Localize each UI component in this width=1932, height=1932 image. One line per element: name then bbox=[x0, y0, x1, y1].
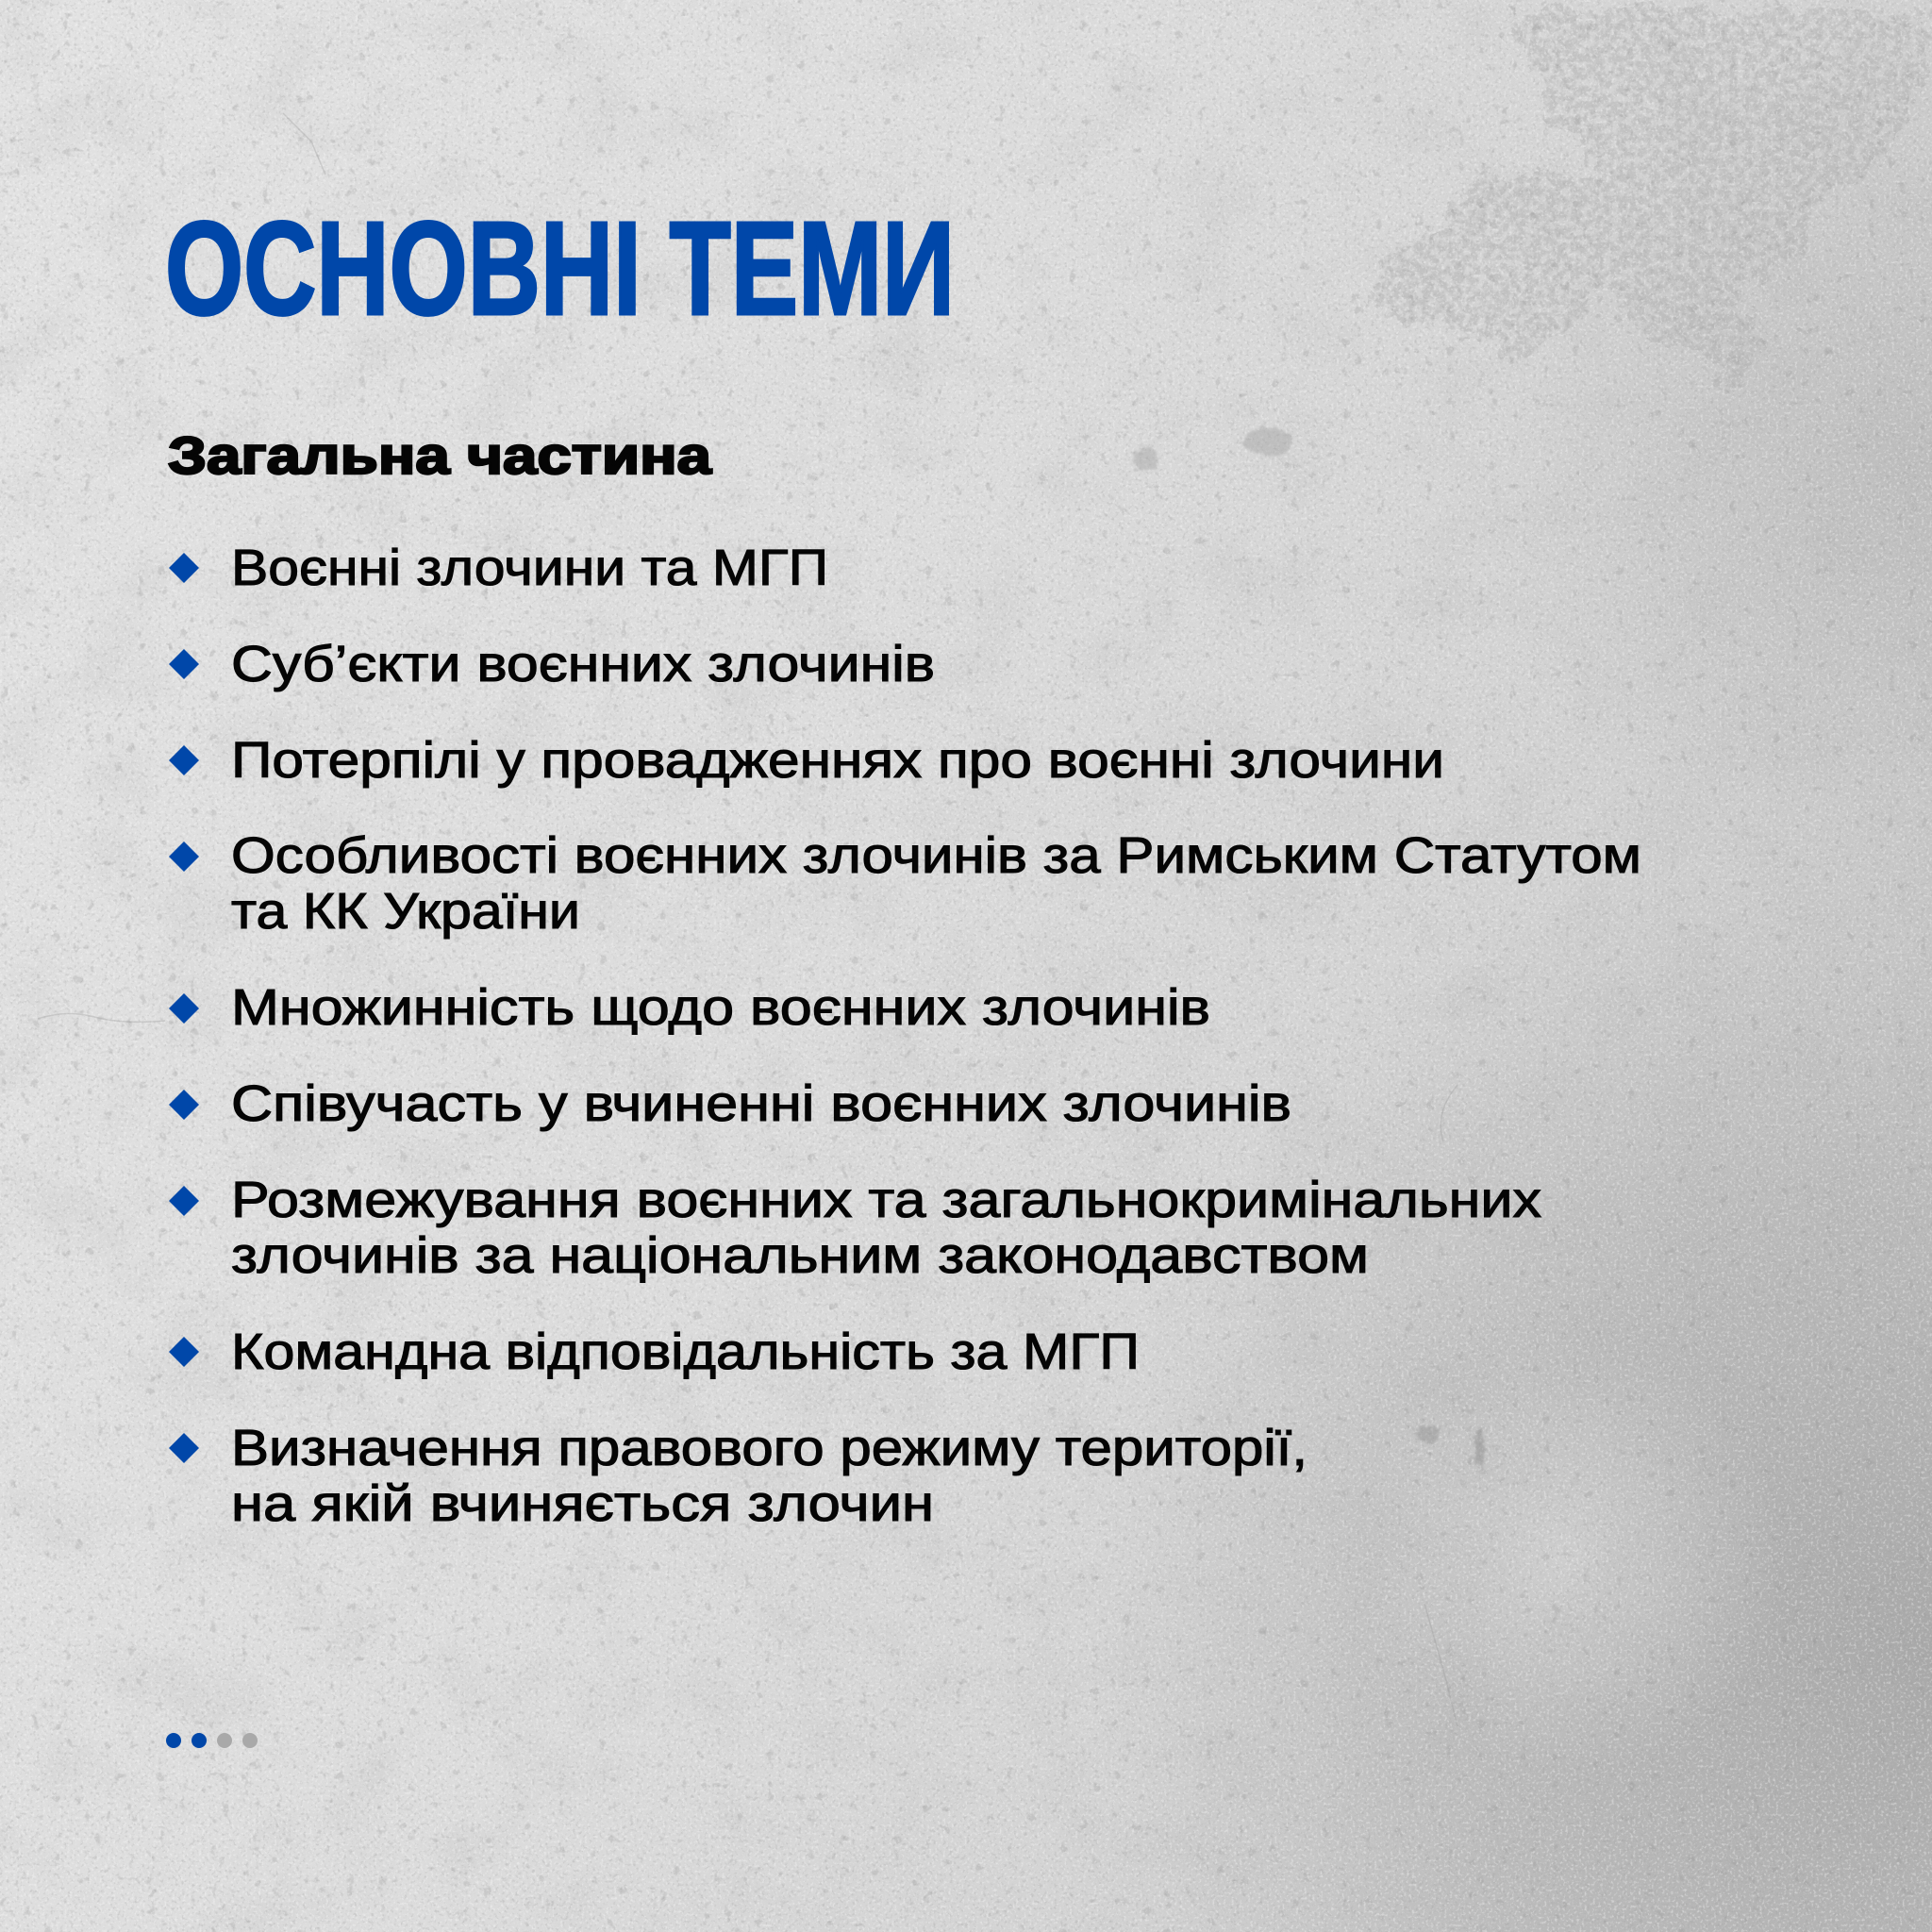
title: ОСНОВНІ ТЕМИ bbox=[165, 193, 955, 342]
list item 6: Співучасть у вчиненні воєнних злочинів bbox=[231, 1075, 1291, 1132]
section heading: Загальна частина bbox=[168, 425, 712, 485]
list item 4: Особливості воєнних злочинів за Римським Статутом bbox=[231, 827, 1641, 884]
pagination dots bbox=[166, 1733, 258, 1748]
list item 4: та КК України bbox=[231, 883, 580, 940]
list item 8: Командна відповідальність за МГП bbox=[231, 1324, 1140, 1380]
list item 7 bbox=[169, 1172, 1541, 1284]
list item 9: Визначення правового режиму території, bbox=[231, 1420, 1307, 1476]
list item 5: Множинність щодо воєнних злочинів bbox=[231, 979, 1210, 1036]
list item 7: Розмежування воєнних та загальнокримінальних bbox=[231, 1172, 1541, 1228]
list item 9: на якій вчиняється злочин bbox=[231, 1475, 934, 1532]
list item 7: злочинів за національним законодавством bbox=[231, 1227, 1369, 1284]
list item 2: Суб’єкти воєнних злочинів bbox=[231, 636, 935, 692]
list item 3: Потерпілі у провадженнях про воєнні злочини bbox=[231, 732, 1444, 789]
list item 1: Воєнні злочини та МГП bbox=[231, 540, 828, 596]
list item 9 bbox=[169, 1420, 1307, 1532]
topics list bbox=[169, 540, 1641, 1532]
list item 4 bbox=[169, 827, 1641, 940]
